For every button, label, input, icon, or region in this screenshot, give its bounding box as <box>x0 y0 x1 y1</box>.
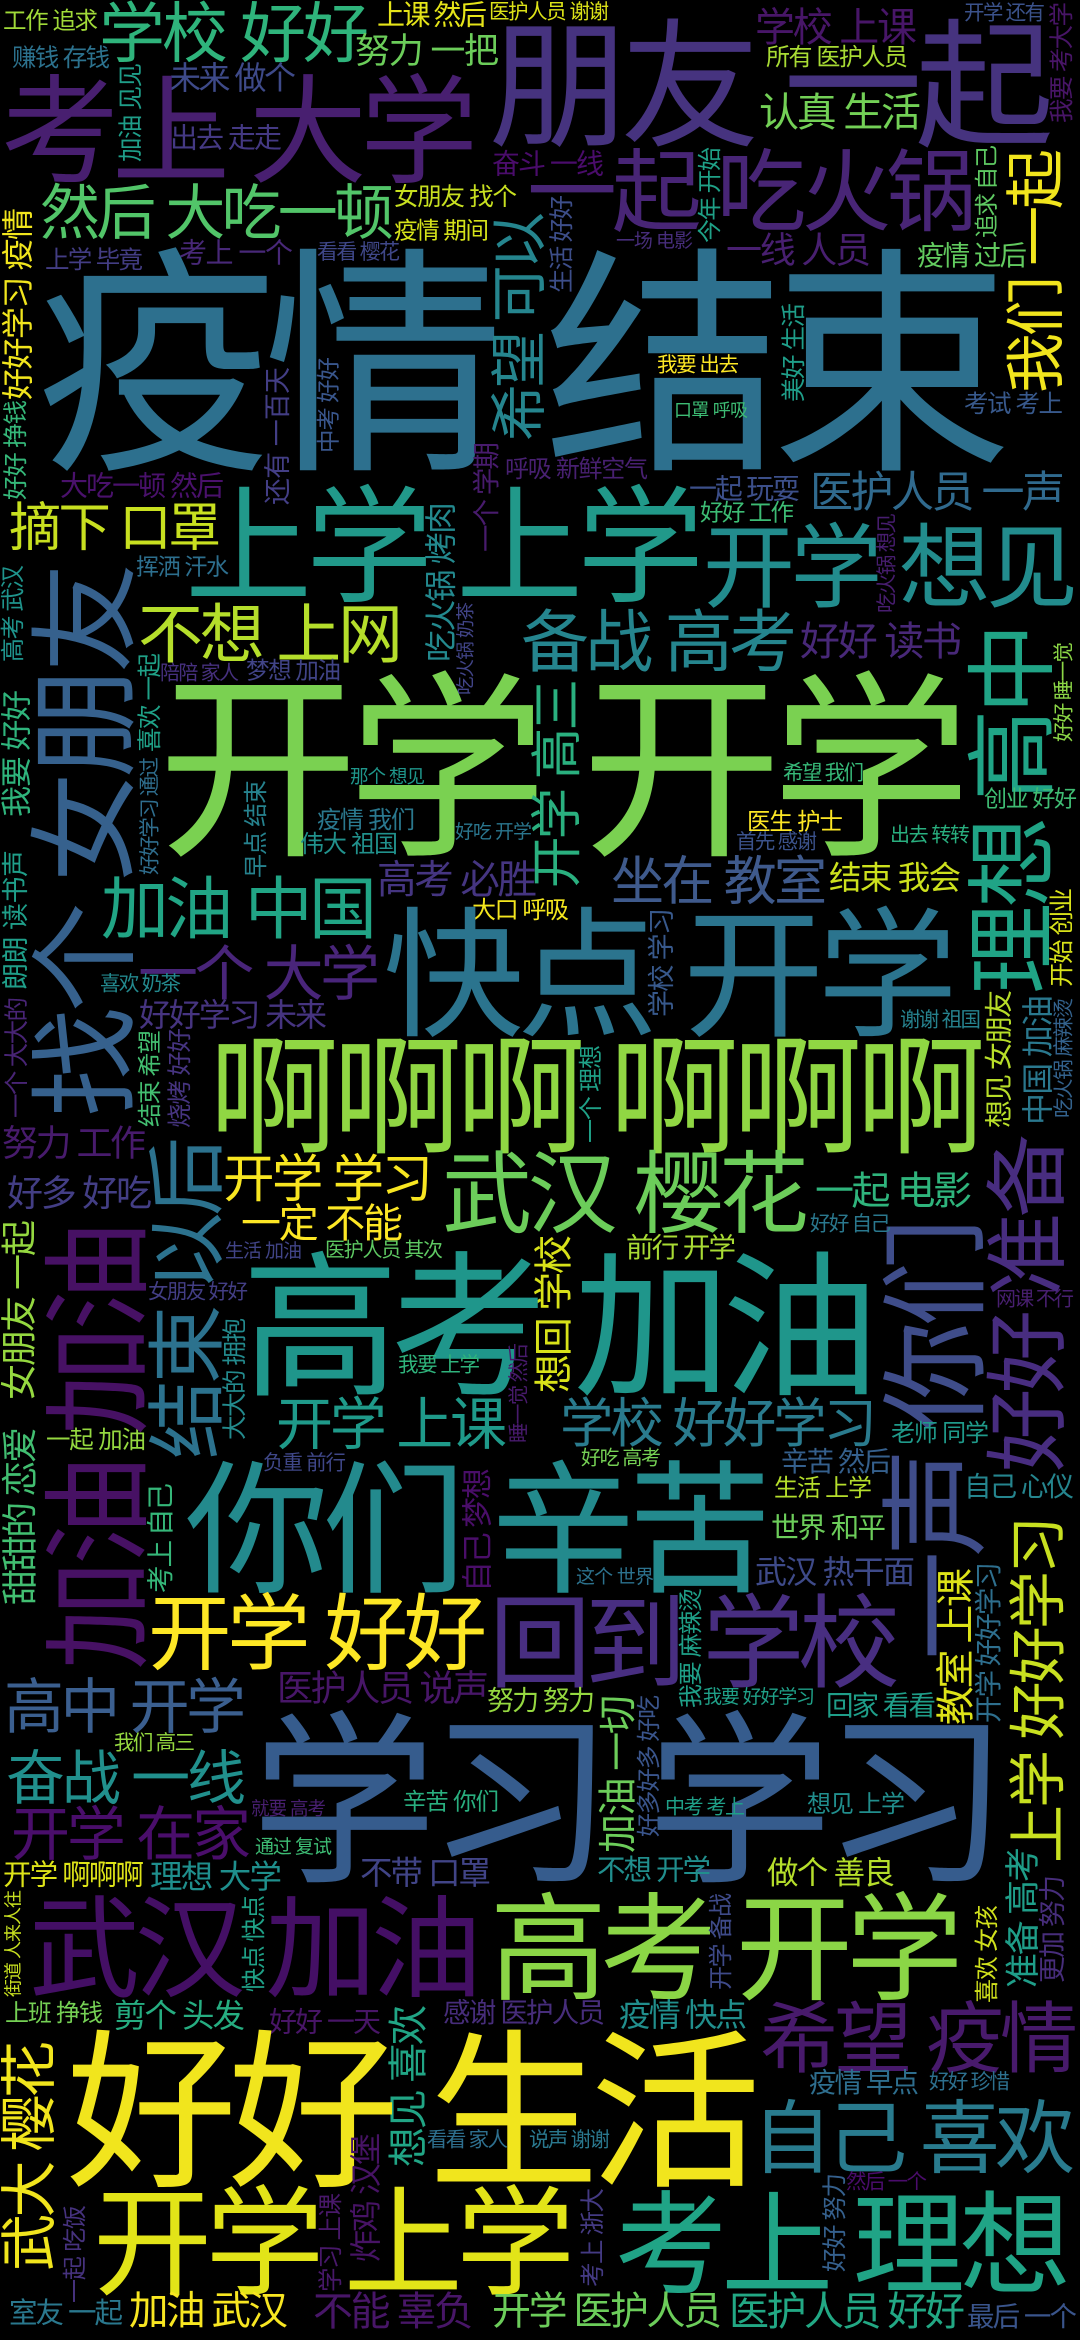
word: 考上 大学: 考上 大学 <box>1 68 478 200</box>
word: 大口 呼吸: 大口 呼吸 <box>472 897 569 924</box>
word: 开学 医护人员: 开学 医护人员 <box>492 2290 722 2333</box>
word: 一个 学期: 一个 学期 <box>471 442 502 552</box>
word: 生活 加油: 生活 加油 <box>225 1240 302 1262</box>
word: 朋友 一起: 朋友 一起 <box>489 10 1054 165</box>
word: 一个 理想: 一个 理想 <box>578 1045 605 1143</box>
word: 生活 好好: 生活 好好 <box>548 195 576 293</box>
word: 挥洒 汗水: 挥洒 汗水 <box>136 554 229 580</box>
word: 希望 可以: 希望 可以 <box>488 212 552 441</box>
word: 睡一觉 然后: 睡一觉 然后 <box>508 1343 531 1443</box>
word: 学习 学习: 学习 学习 <box>251 1701 1009 1908</box>
word: 加油 加油: 加油 加油 <box>39 1221 162 1670</box>
word: 自己 心仪: 自己 心仪 <box>964 1471 1074 1502</box>
word: 喜欢 奶茶: 喜欢 奶茶 <box>100 973 181 996</box>
word: 开学 想见: 开学 想见 <box>703 518 1078 620</box>
word: 未来 做个: 未来 做个 <box>169 60 296 96</box>
word: 还有 一百天: 还有 一百天 <box>263 367 293 505</box>
word: 医护人员 其次: 医护人员 其次 <box>325 1238 443 1261</box>
word: 一场 电影: 一场 电影 <box>616 230 693 252</box>
word: 开学 学习: 开学 学习 <box>223 1150 433 1208</box>
word: 剪个 头发: 剪个 头发 <box>114 1998 245 2034</box>
word: 女朋友 找个: 女朋友 找个 <box>394 183 517 211</box>
word: 所有 医护人员: 所有 医护人员 <box>766 44 908 71</box>
word: 然后 大吃一顿: 然后 大吃一顿 <box>40 180 394 247</box>
word: 开学 好好学习: 开学 好好学习 <box>973 1562 1004 1723</box>
word: 不想 上网: 不想 上网 <box>138 598 403 671</box>
word: 开学 开学: 开学 开学 <box>158 660 971 883</box>
word: 最后 一个: 最后 一个 <box>967 2301 1077 2332</box>
word: 好吃 开学: 好吃 开学 <box>455 821 532 843</box>
word: 梦想 加油: 梦想 加油 <box>246 658 341 684</box>
word: 赚钱 存钱: 赚钱 存钱 <box>12 44 110 72</box>
word: 上学 上学: 上学 上学 <box>185 477 704 619</box>
word: 学习 上课: 学习 上课 <box>317 2193 345 2292</box>
word: 女朋友 好好: 女朋友 好好 <box>148 1281 248 1304</box>
word: 不想 开学: 不想 开学 <box>597 1855 711 1887</box>
word: 中国 加油: 中国 加油 <box>1020 995 1056 1125</box>
word: 自己 喜欢: 自己 喜欢 <box>752 2095 1075 2184</box>
word: 回到 学校: 回到 学校 <box>489 1588 900 1702</box>
word: 加油 一切: 加油 一切 <box>597 1695 640 1853</box>
word: 开学 上课: 开学 上课 <box>276 1393 507 1457</box>
word: 一定 不能: 一定 不能 <box>241 1202 403 1246</box>
word: 啊啊啊 啊啊啊: 啊啊啊 啊啊啊 <box>209 1025 986 1171</box>
word: 这个 世界: 这个 世界 <box>576 1566 654 1588</box>
word: 街道 人来人往: 街道 人来人往 <box>4 1890 24 1997</box>
word: 学校 上课: 学校 上课 <box>755 6 917 50</box>
word: 喜欢 一起: 喜欢 一起 <box>136 653 164 752</box>
word: 加油 中国: 加油 中国 <box>101 872 377 948</box>
word: 吃火锅 想见: 吃火锅 想见 <box>876 513 899 613</box>
word: 好多 好吃: 好多 好吃 <box>7 1172 152 1213</box>
word: 朗朗 读书声: 朗朗 读书声 <box>1 850 31 990</box>
word: 坐在 教室: 坐在 教室 <box>611 853 827 912</box>
word: 谢谢 祖国: 谢谢 祖国 <box>900 1009 981 1032</box>
word: 看看 家人: 看看 家人 <box>427 2129 508 2152</box>
word: 武大 樱花: 武大 樱花 <box>0 2041 62 2271</box>
word: 一起 加油: 一起 加油 <box>46 1426 146 1454</box>
word: 一起 吃饭: 一起 吃饭 <box>62 2205 89 2303</box>
word: 美好 生活: 美好 生活 <box>780 303 808 402</box>
word: 好多好多 好吃: 好多好多 好吃 <box>636 1695 663 1837</box>
word: 想见 喜欢: 想见 喜欢 <box>387 2005 431 2167</box>
word: 结束 希望: 结束 希望 <box>137 1030 164 1127</box>
word: 医护人员 谢谢: 医护人员 谢谢 <box>489 1 609 24</box>
word: 一声 你们: 一声 你们 <box>876 1218 998 1660</box>
word: 追求 自己: 追求 自己 <box>974 145 1000 238</box>
word: 一线 人员: 一线 人员 <box>726 229 871 270</box>
word: 我要 麻辣烫: 我要 麻辣烫 <box>678 1588 705 1708</box>
word: 呼吸 新鲜空气: 呼吸 新鲜空气 <box>505 456 648 483</box>
word: 医护人员 说声: 医护人员 说声 <box>277 1667 489 1708</box>
word: 希望 我们: 希望 我们 <box>783 762 864 785</box>
word: 说声 谢谢: 说声 谢谢 <box>529 2129 610 2152</box>
word: 快点 开学: 快点 开学 <box>383 897 958 1055</box>
word: 武汉 热干面: 武汉 热干面 <box>755 1554 915 1590</box>
word: 学校 好好学习: 学校 好好学习 <box>560 1395 877 1454</box>
word: 想见 上学: 想见 上学 <box>807 1791 905 1818</box>
word: 通过 复试: 通过 复试 <box>255 1836 332 1858</box>
word: 开学 在家: 开学 在家 <box>11 1802 251 1868</box>
word: 我要 出去: 我要 出去 <box>657 354 739 377</box>
word: 准备 高考: 准备 高考 <box>1004 1847 1043 1988</box>
word: 武汉 樱花: 武汉 樱花 <box>442 1145 809 1245</box>
word: 我要 上学: 我要 上学 <box>398 1354 480 1377</box>
word: 考试 考上: 考试 考上 <box>964 390 1063 418</box>
word: 今年 开始: 今年 开始 <box>697 147 724 243</box>
word: 自己 梦想: 自己 梦想 <box>460 1468 495 1592</box>
word: 做个 善良: 做个 善良 <box>767 1855 895 1891</box>
word: 出去 转转: 出去 转转 <box>890 823 970 846</box>
word: 考上 理想: 考上 理想 <box>615 2183 1071 2308</box>
word: 想见 女朋友: 想见 女朋友 <box>983 990 1014 1128</box>
word: 疫情 早点: 疫情 早点 <box>809 2067 919 2098</box>
word: 开学 好好: 开学 好好 <box>148 1587 487 1681</box>
word: 世界 和平: 世界 和平 <box>771 1513 886 1545</box>
word: 想回 学校: 想回 学校 <box>533 1235 576 1393</box>
word: 教室 上课: 教室 上课 <box>935 1568 978 1725</box>
word: 老师 同学: 老师 同学 <box>891 1420 989 1447</box>
word: 高考 武汉: 高考 武汉 <box>0 565 27 662</box>
word: 网课 不行: 网课 不行 <box>996 1287 1074 1310</box>
word: 认真 生活: 认真 生活 <box>759 91 921 135</box>
word: 加油 武汉: 加油 武汉 <box>129 2290 288 2334</box>
word: 出去 走走: 出去 走走 <box>170 122 282 153</box>
word: 甜甜的 恋爱: 甜甜的 恋爱 <box>0 1427 40 1605</box>
word: 好好学习 通过: 好好学习 通过 <box>139 757 162 875</box>
word: 看看 樱花: 看看 樱花 <box>317 241 400 264</box>
word: 感谢 医护人员: 感谢 医护人员 <box>443 1997 605 2028</box>
word: 好好 珍惜: 好好 珍惜 <box>929 2071 1010 2094</box>
word: 疫情 期间: 疫情 期间 <box>394 218 489 244</box>
word: 开学 备战: 开学 备战 <box>708 1893 735 1990</box>
word: 开学 上学: 开学 上学 <box>93 2178 575 2311</box>
word: 吃火锅 烤肉: 吃火锅 烤肉 <box>423 502 459 662</box>
word: 回家 看看: 回家 看看 <box>826 1690 936 1721</box>
word: 摘下 口罩: 摘下 口罩 <box>9 498 221 557</box>
word: 就要 高考: 就要 高考 <box>251 1798 326 1819</box>
word: 喜欢 女孩: 喜欢 女孩 <box>974 1905 1001 2003</box>
word: 好好 睡一觉: 好好 睡一觉 <box>1053 642 1076 742</box>
word: 好好 准备: 好好 准备 <box>981 1134 1075 1472</box>
word: 工作 追求: 工作 追求 <box>3 8 98 34</box>
word: 好好 生活: 好好 生活 <box>66 2019 761 2210</box>
word: 我要 考大学: 我要 考大学 <box>1048 2 1076 123</box>
word: 你们 辛苦: 你们 辛苦 <box>185 1451 772 1612</box>
word: 找个 女朋友: 找个 女朋友 <box>26 563 149 1117</box>
word: 努力 努力: 努力 努力 <box>487 1686 595 1716</box>
word: 好吃 高考: 好吃 高考 <box>581 1446 661 1469</box>
word: 高考 开学: 高考 开学 <box>490 1884 963 2015</box>
word: 奋斗 一线: 奋斗 一线 <box>492 148 604 179</box>
word: 口罩 呼吸: 口罩 呼吸 <box>674 401 748 421</box>
word: 疫情 结束: 疫情 结束 <box>36 234 1012 503</box>
word: 疫情 我们: 疫情 我们 <box>317 807 415 834</box>
word: 医生 护士: 医生 护士 <box>747 809 843 835</box>
word: 疫情 过后: 疫情 过后 <box>917 240 1027 271</box>
word: 好好学习 疫情: 好好学习 疫情 <box>0 208 36 400</box>
word: 上学 好好学习: 上学 好好学习 <box>1006 1516 1071 1863</box>
word: 武汉 加油: 武汉 加油 <box>29 1888 482 2012</box>
word: 结束 以后: 结束 以后 <box>143 1137 232 1459</box>
word: 奋战 一线: 奋战 一线 <box>6 1746 246 1812</box>
word: 好好 努力: 好好 努力 <box>821 2173 849 2272</box>
word: 加油 见见: 加油 见见 <box>117 63 145 162</box>
word: 理想 大学: 理想 大学 <box>150 1859 282 1895</box>
word: 我要 好好: 我要 好好 <box>0 690 34 817</box>
word: 负重 前行: 负重 前行 <box>263 1452 346 1475</box>
word: 大吃一顿 然后: 大吃一顿 然后 <box>60 470 224 501</box>
word: 伟大 祖国: 伟大 祖国 <box>300 831 398 858</box>
word: 好好 自己: 好好 自己 <box>810 1213 891 1236</box>
word: 疫情 快点: 疫情 快点 <box>619 1997 747 2033</box>
word: 室友 一起: 室友 一起 <box>9 2298 123 2330</box>
word: 那个 想见: 那个 想见 <box>350 766 425 787</box>
word: 一个 大学: 一个 大学 <box>138 941 380 1008</box>
word: 开学 还有: 开学 还有 <box>964 2 1045 25</box>
word: 努力 工作: 努力 工作 <box>2 1122 146 1163</box>
word: 高考 加油: 高考 加油 <box>242 1242 879 1417</box>
word: 备战 高考: 备战 高考 <box>521 605 797 681</box>
word: 陪陪 家人: 陪陪 家人 <box>160 661 239 684</box>
word: 上课 然后: 上课 然后 <box>377 0 487 30</box>
word: 高考 必胜: 高考 必胜 <box>377 859 537 903</box>
word: 医护人员 一声: 医护人员 一声 <box>810 469 1065 517</box>
word: 好好 一天: 好好 一天 <box>269 2006 381 2037</box>
word: 早点 结束: 早点 结束 <box>243 780 270 878</box>
word: 一起 吃火锅: 一起 吃火锅 <box>527 143 976 243</box>
word: 辛苦 你们: 辛苦 你们 <box>403 1789 499 1815</box>
word: 中考 好好: 中考 好好 <box>316 357 342 453</box>
word: 开学 高三: 开学 高三 <box>528 679 586 888</box>
word: 高中 开学: 高中 开学 <box>4 1674 246 1741</box>
word: 希望 疫情: 希望 疫情 <box>760 1995 1078 2083</box>
word: 好好 读书: 好好 读书 <box>800 620 962 664</box>
word: 上班 挣钱: 上班 挣钱 <box>5 2000 103 2027</box>
word: 考上 一个: 考上 一个 <box>179 237 293 268</box>
word: 考上 自己: 考上 自己 <box>145 1483 176 1593</box>
word: 我们 高三: 我们 高三 <box>114 1732 195 1755</box>
word: 理想 高中: 理想 高中 <box>964 623 1065 994</box>
word: 医护人员 好好: 医护人员 好好 <box>729 2290 965 2334</box>
word: 快点 快点: 快点 快点 <box>241 1895 268 1992</box>
word: 中考 考上: 中考 考上 <box>665 1795 745 1818</box>
word: 我要 好好学习: 我要 好好学习 <box>703 1686 815 1708</box>
word: 前行 开学: 前行 开学 <box>626 1232 736 1263</box>
word: 好好学习 未来: 好好学习 未来 <box>139 997 327 1033</box>
word: 烧烤 好好: 烧烤 好好 <box>166 1028 194 1128</box>
word: 结束 我会: 结束 我会 <box>829 860 961 896</box>
word: 一个 大大的: 一个 大大的 <box>3 997 31 1118</box>
word: 考上 浙大: 考上 浙大 <box>579 2188 607 2287</box>
word: 然后 一个: 然后 一个 <box>846 2171 927 2194</box>
word: 首先 感谢: 首先 感谢 <box>736 831 817 854</box>
word: 上学 毕竟: 上学 毕竟 <box>45 246 143 274</box>
word: 好好 工作: 好好 工作 <box>700 500 794 526</box>
word: 好好 挣钱: 好好 挣钱 <box>2 400 30 500</box>
word: 更加 努力: 更加 努力 <box>1038 1875 1068 1983</box>
word: 一起 电影: 一起 电影 <box>815 1170 972 1213</box>
word: 不带 口罩: 不带 口罩 <box>360 1855 491 1891</box>
word: 努力 一把: 努力 一把 <box>355 32 499 71</box>
word: 开始 创业: 开始 创业 <box>1048 888 1076 987</box>
word: 辛苦 然后: 辛苦 然后 <box>781 1446 891 1477</box>
word: 吃火锅 奶茶: 吃火锅 奶茶 <box>455 602 476 695</box>
word: 大大的 拥抱: 大大的 拥抱 <box>221 1318 249 1440</box>
word: 吃火锅 麻辣烫: 吃火锅 麻辣烫 <box>1053 998 1076 1118</box>
word: 一起 玩耍: 一起 玩耍 <box>689 473 800 504</box>
word: 开学 啊啊啊: 开学 啊啊啊 <box>3 1860 144 1892</box>
word: 学校 学习: 学校 学习 <box>647 908 677 1017</box>
word: 我们 一起: 我们 一起 <box>1003 149 1070 393</box>
word: 炸鸡 汉堡: 炸鸡 汉堡 <box>348 2133 384 2262</box>
word: 不能 辜负: 不能 辜负 <box>313 2290 474 2334</box>
word: 创业 好好: 创业 好好 <box>984 786 1077 812</box>
word: 生活 上学: 生活 上学 <box>774 1475 872 1502</box>
